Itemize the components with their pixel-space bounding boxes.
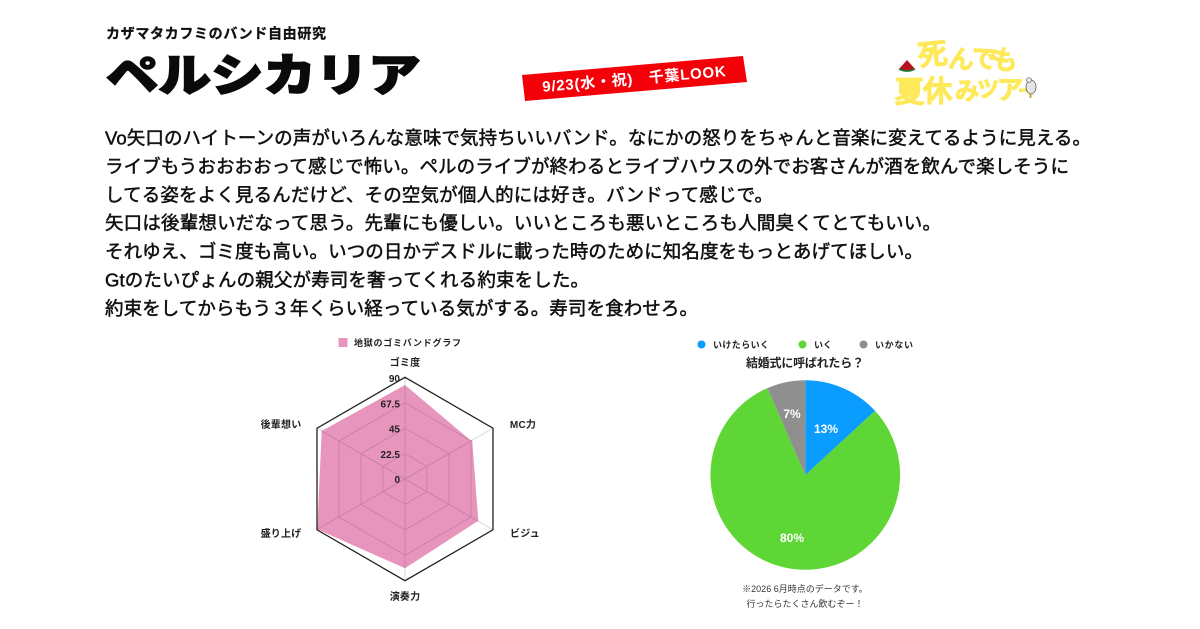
logo line 2: み	[955, 78, 979, 105]
radar axis labels: MC力	[510, 418, 536, 431]
subtitle: カザマタカフミのバンド自由研究	[106, 26, 326, 42]
logo line 1: 死	[917, 38, 949, 72]
footnote: 行ったらたくさん飲むぞー！	[746, 598, 864, 609]
pie title: 結婚式に呼ばれたら？	[746, 355, 864, 370]
pie legend: いけたらいく	[713, 340, 769, 350]
pie value labels: 7%	[783, 407, 801, 421]
body text	[105, 128, 1091, 319]
logo line 1: で	[970, 43, 998, 75]
pie legend	[698, 340, 913, 350]
logo line 2: 休	[923, 75, 952, 108]
radar outer hexagon	[317, 377, 493, 581]
date banner: 9/23(水・祝) 千葉LOOK	[542, 63, 727, 96]
slice: いけたらいく	[805, 380, 875, 475]
pie legend: いく	[814, 340, 832, 350]
footnote: ※2026 6月時点のデータです。	[742, 583, 868, 594]
slice: いく	[710, 388, 900, 570]
radar axis labels	[261, 356, 540, 603]
line 1: Vo矢口のハイトーンの声がいろんな意味で気持ちいいバンド。なにかの怒りをちゃんと音楽に変えてるように見える。	[105, 128, 1091, 148]
line 3: してる姿をよく見るんだけど、その空気が個人的には好き。バンドって感じで。	[105, 184, 773, 206]
radar axis labels: 後輩想い	[261, 418, 301, 431]
radar chart	[261, 337, 540, 603]
icon: bird	[1026, 78, 1036, 98]
line 4: 矢口は後輩想いだなって思う。先輩にも優しい。いいところも悪いところも人間臭くてとてもいい。	[105, 212, 941, 234]
line 7: 約束をしてからもう３年くらい経っている気がする。寿司を食わせろ。	[105, 298, 698, 319]
radar scale labels: 22.5	[381, 450, 400, 461]
pie value labels: 13%	[814, 422, 838, 436]
logo line 1	[917, 38, 1020, 77]
radar data polygon	[317, 385, 478, 568]
radar grid	[317, 385, 478, 568]
title: ペルシカリア	[106, 51, 421, 101]
slice: いかない	[767, 380, 805, 475]
radar scale labels: 45	[389, 424, 400, 436]
icon: watermelon	[899, 60, 915, 71]
radar axis labels: ビジュ	[510, 527, 540, 540]
radar spokes	[317, 377, 493, 581]
logo line 2: ツ	[977, 77, 999, 102]
radar axis labels: 盛り上げ	[261, 527, 301, 540]
logo line 2: 夏	[895, 77, 924, 109]
radar axis labels: 演奏力	[390, 590, 420, 603]
line 5: それゆえ、ゴミ度も高い。いつの日かデスドルに載った時のために知名度をもっとあげてほしい。	[105, 241, 923, 262]
footnote	[742, 583, 868, 609]
logo line 1: も	[990, 43, 1020, 77]
radar legend: 地獄のゴミバンドグラフ	[354, 337, 461, 348]
pie chart	[698, 340, 913, 609]
logo line 2: ア	[997, 75, 1023, 105]
logo line 1: ん	[947, 45, 975, 75]
radar scale labels	[381, 374, 400, 486]
pie value labels: 80%	[780, 531, 804, 545]
logo line 2	[895, 75, 1033, 109]
radar axis labels: ゴミ度	[390, 356, 420, 369]
radar scale labels: 67.5	[381, 400, 400, 410]
line 6: Gtのたいぴょんの親父が寿司を奢ってくれる約束をした。	[105, 270, 589, 290]
line 2: ライブもうおおおおって感じで怖い。ペルのライブが終わるとライブハウスの外でお客さんが酒を飲んで楽しそうに	[105, 156, 1069, 177]
pie value labels	[780, 407, 838, 545]
date banner	[522, 56, 747, 101]
radar scale labels: 0	[394, 475, 400, 486]
radar scale labels: 90	[389, 374, 400, 385]
tour logo	[895, 38, 1036, 109]
pie legend: いかない	[875, 340, 913, 350]
